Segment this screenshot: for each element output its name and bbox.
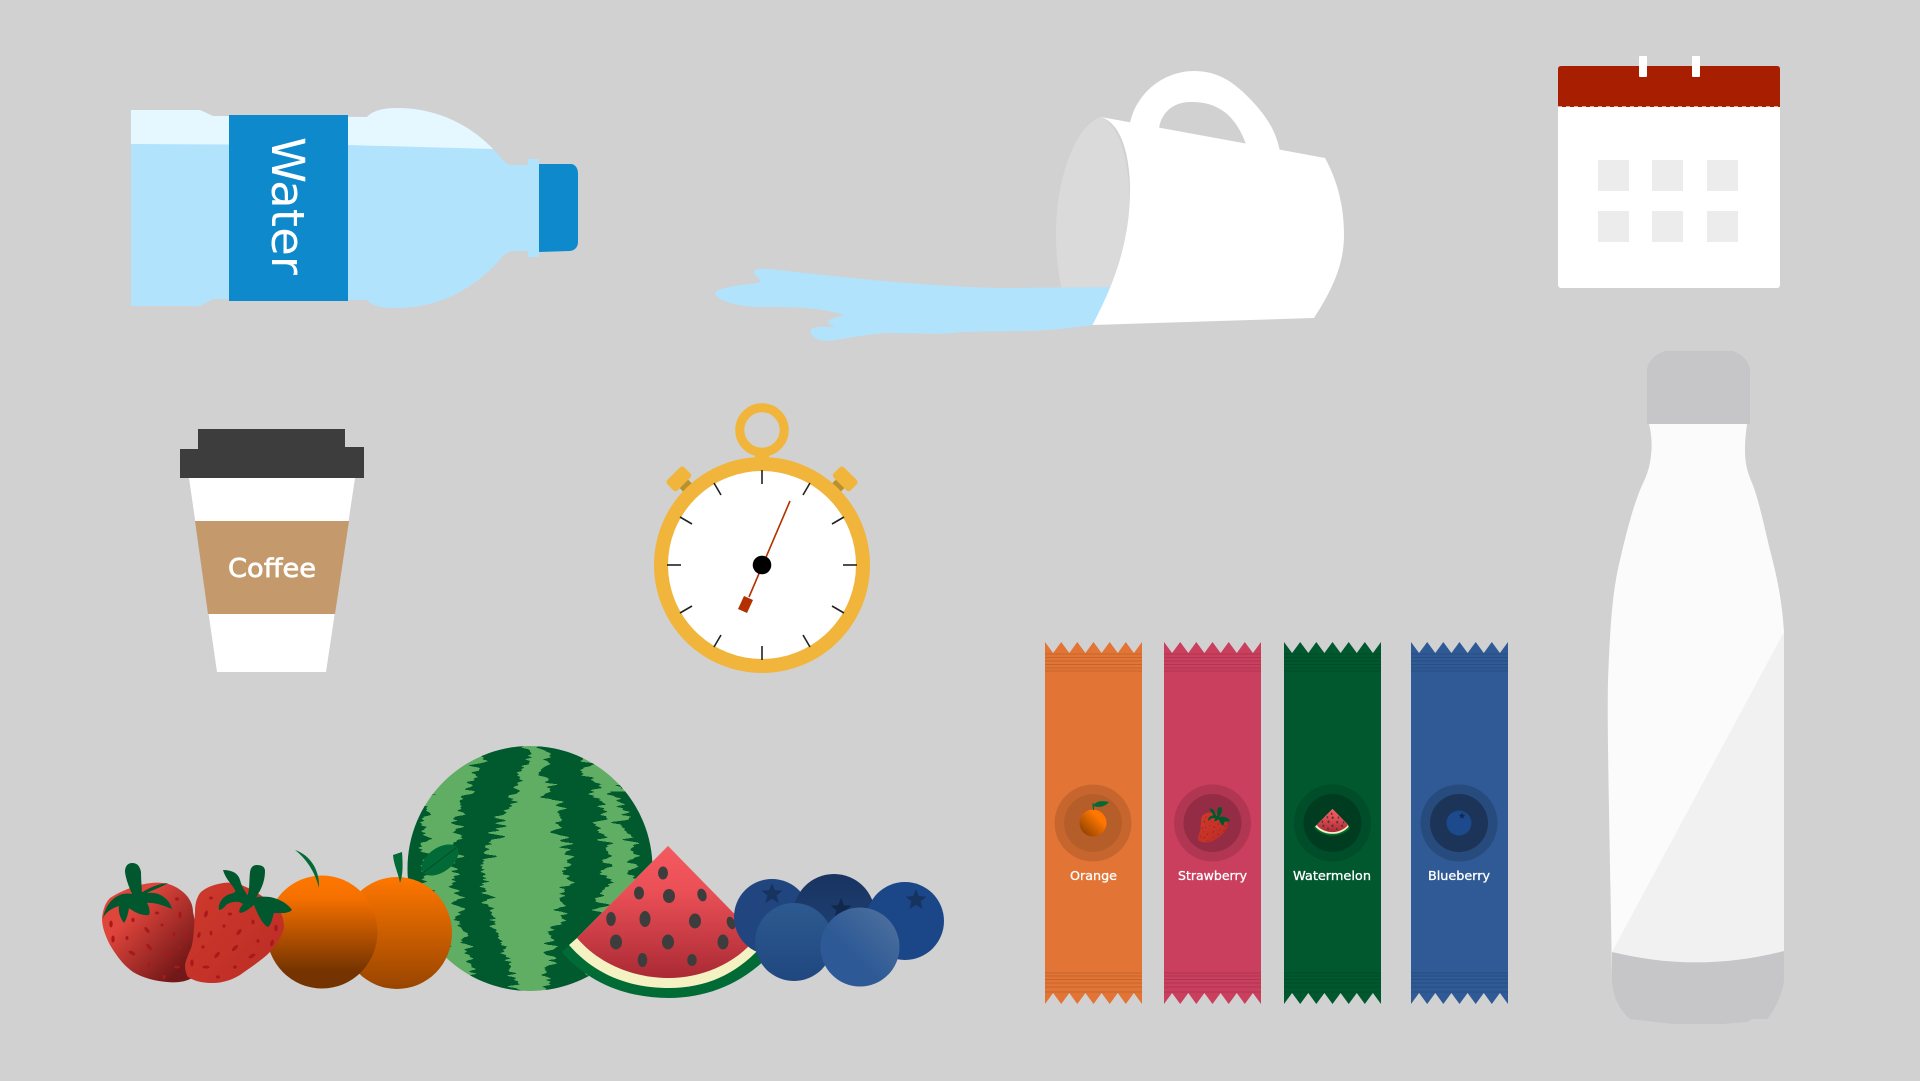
cup lid (180, 429, 364, 478)
blueberries (734, 874, 944, 986)
label: Orange: Orange (1070, 868, 1117, 883)
label: Watermelon: Watermelon (1293, 868, 1371, 883)
bottle base (1612, 951, 1784, 1024)
insulated bottle (1608, 351, 1784, 1024)
strawberry left (102, 863, 196, 982)
pack: Strawberry (1164, 642, 1261, 1004)
label text: Water: Water (261, 137, 314, 276)
calendar (1558, 56, 1780, 288)
pack: Blueberry (1411, 642, 1508, 1004)
coffee cup (180, 429, 364, 672)
mug body (1092, 117, 1344, 325)
stopwatch (661, 408, 863, 666)
bottle shading (1612, 632, 1784, 975)
center pin (753, 556, 771, 574)
bottle cap (539, 164, 578, 252)
stopwatch top ring (740, 408, 784, 452)
icon: blueberry (1420, 784, 1498, 862)
bottle body (1608, 424, 1784, 975)
calendar day squares (1598, 160, 1738, 242)
mug interior (1056, 117, 1130, 290)
icon: strawberry (1174, 784, 1251, 862)
bottle label (229, 115, 348, 301)
stopwatch hand (738, 501, 790, 613)
calendar rings (1639, 56, 1700, 77)
pack: Watermelon (1284, 642, 1381, 1004)
water bottle (131, 108, 578, 308)
watermelon whole (408, 746, 652, 991)
strawberry right (185, 865, 292, 983)
icon: orange (1054, 784, 1132, 862)
icon: watermelon (1294, 784, 1371, 862)
right button (826, 465, 859, 498)
leaf (416, 838, 464, 882)
label: Blueberry: Blueberry (1428, 868, 1491, 883)
infographic illustration (102, 56, 1784, 1024)
orange front (266, 850, 378, 988)
left button (665, 465, 698, 498)
fruit group (102, 735, 944, 1005)
pack: Orange (1045, 642, 1142, 1004)
cup sleeve (195, 521, 349, 614)
bottle cap (1647, 351, 1750, 424)
spilled water (715, 269, 1120, 341)
tipped mug with spilled water (715, 71, 1344, 341)
mug handle (1130, 71, 1280, 152)
watermelon slice (562, 846, 768, 998)
tick marks (667, 470, 857, 660)
sleeve text: Coffee: Coffee (228, 554, 316, 584)
label: Strawberry: Strawberry (1178, 868, 1248, 883)
stopwatch face (661, 464, 863, 666)
calendar header (1558, 66, 1780, 107)
orange back (342, 852, 452, 989)
